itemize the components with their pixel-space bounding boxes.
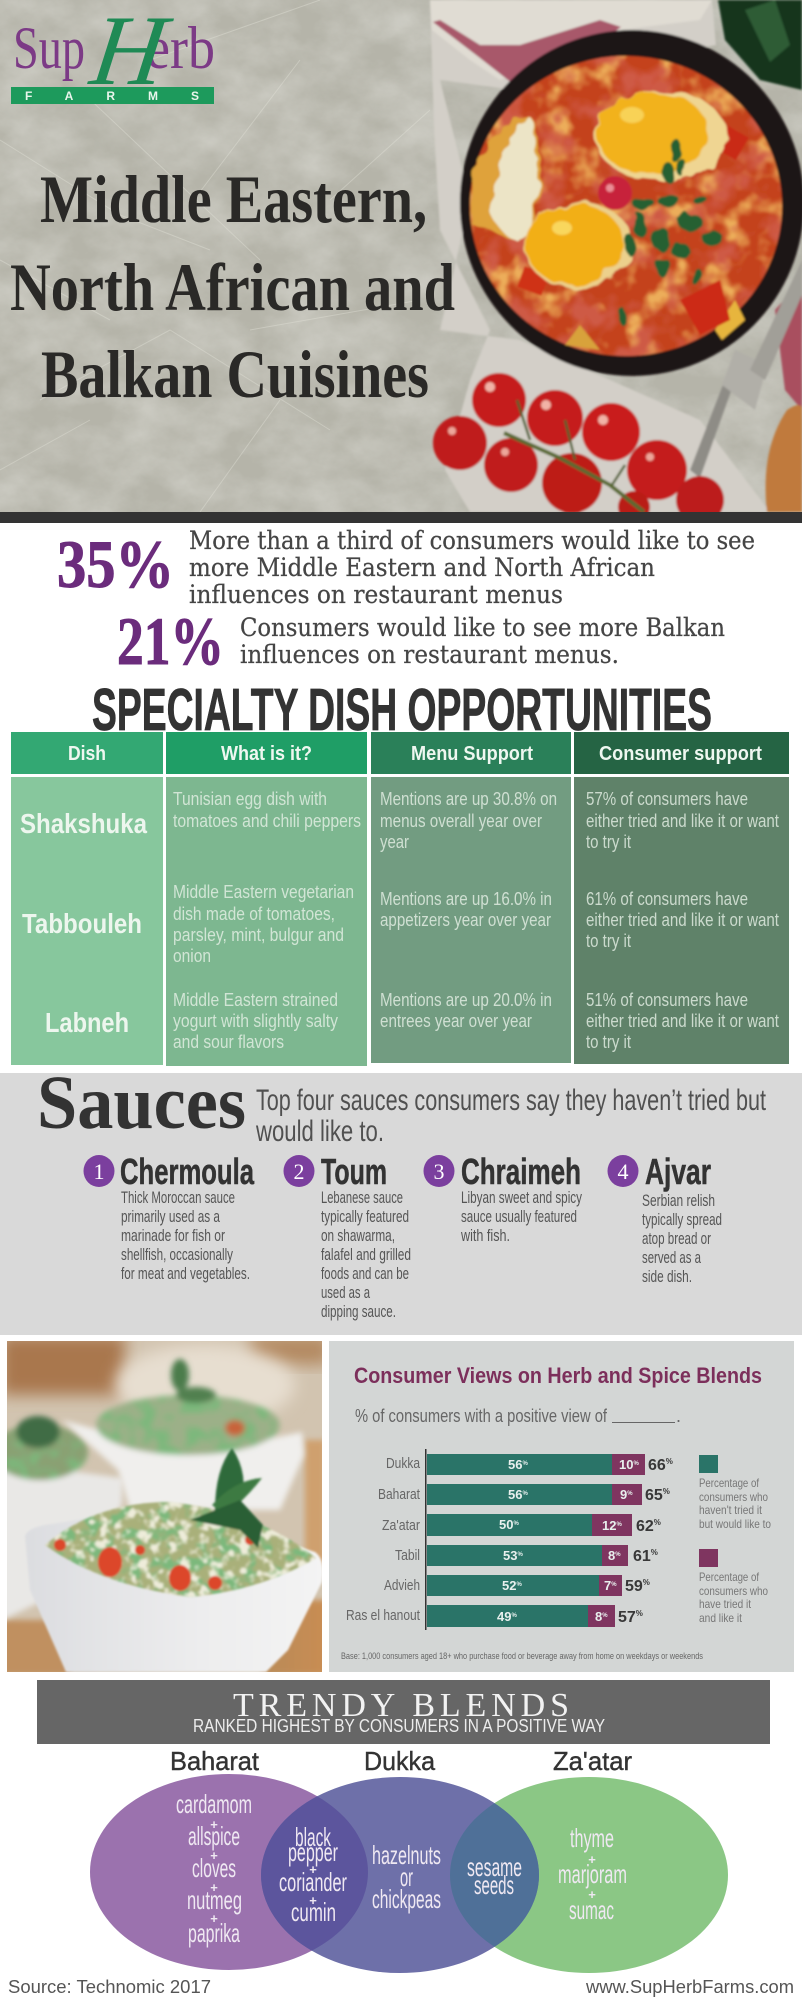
- column: what is it: dish made of tomatoes,: [173, 904, 335, 924]
- column: consumer support: to try it: [586, 1032, 631, 1052]
- stat text: Consumers would like to see more Balkan: [240, 613, 725, 642]
- bar: Baharat: 56: [508, 1487, 522, 1502]
- bar: Baharat: [378, 1484, 670, 1505]
- bar: Za'atar: Za'atar: [382, 1517, 420, 1534]
- sauces intro: [255, 1084, 766, 1148]
- bar: Tabil: 61: [633, 1548, 651, 1565]
- sauce 3: Chraimeh: Chraimeh: [461, 1151, 581, 1192]
- bar: Ras el hanout: 49: [497, 1609, 511, 1624]
- bar: Za'atar: %: [513, 1521, 519, 1527]
- chart title: Consumer Views on Herb and Spice Blends: [354, 1363, 762, 1388]
- chart footnote: Base: 1,000 consumers aged 18+ who purchase food or beverage away from home on weekdays or weekends: [341, 1651, 703, 1661]
- banner title: TRENDY BLENDS: [233, 1687, 569, 1724]
- bar: Dukka: 66: [648, 1457, 666, 1474]
- column: what is it: [166, 777, 367, 1066]
- stat text: influences on restaurant menus.: [240, 640, 619, 669]
- column: what is it: Middle Eastern strained: [173, 990, 338, 1010]
- sauces background: [0, 1073, 802, 1335]
- column: menu support: menus overall year over: [380, 811, 542, 831]
- sauce 2: Toum: Lebanese sauce: [321, 1188, 403, 1207]
- banner background: [37, 1680, 770, 1744]
- venn circles: [90, 1774, 728, 1973]
- sauce 1: Chermoula: shellfish, occasionally: [121, 1245, 233, 1264]
- Za'atar ingredients: +: [588, 1852, 596, 1867]
- bar: Ras el hanout: %: [511, 1613, 517, 1619]
- bar: Dukka: %: [522, 1461, 528, 1467]
- Baharat and Dukka shared ingredients: pepper: [288, 1837, 338, 1867]
- front bowl: [26, 1522, 322, 1672]
- bar chart: [346, 1449, 673, 1630]
- bar: Baharat: %: [522, 1491, 528, 1497]
- Baharat ingredients: +: [210, 1880, 218, 1895]
- bar: Tabil: %: [615, 1552, 621, 1558]
- sauce 2: Toum: foods and can be: [321, 1264, 409, 1283]
- number 35%: 35%: [57, 526, 174, 602]
- column: what is it: Tunisian egg dish with: [173, 789, 327, 809]
- column: what is it: tomatoes and chili peppers: [173, 811, 361, 831]
- stat text: More than a third of consumers would like to see: [189, 526, 755, 555]
- Za'atar ingredients: sumac: [569, 1895, 614, 1925]
- title: Middle Eastern,: [40, 161, 427, 237]
- Baharat ingredients: [176, 1789, 252, 1948]
- sauce 3: Chraimeh: sauce usually featured: [461, 1207, 577, 1226]
- source credit: Source: Technomic 2017: [8, 1977, 211, 1997]
- sauce 2: Toum: typically featured: [321, 1207, 409, 1226]
- stat text: [189, 526, 755, 609]
- sauce 2: Toum: used as a: [321, 1283, 370, 1302]
- Dukka and Za'atar shared ingredients: [467, 1852, 522, 1900]
- logo word FARMS: FARMS: [25, 89, 199, 103]
- Baharat ingredients: allspice: [188, 1821, 240, 1851]
- sauce 4: Ajvar: atop bread or: [642, 1229, 711, 1248]
- website credit: www.SupHerbFarms.com: [585, 1977, 794, 1997]
- panel: sauces: [0, 1061, 802, 1335]
- Za'atar ingredients: [558, 1823, 627, 1925]
- sauce 1: Chermoula: primarily used as a: [121, 1207, 220, 1226]
- sauces heading: Sauces: [37, 1061, 246, 1145]
- Baharat ingredients: cardamom: [176, 1789, 252, 1819]
- venn diagram: spice blends: [90, 1746, 728, 1973]
- bar: Dukka: 10: [619, 1457, 633, 1472]
- bar: Za'atar: [382, 1514, 661, 1536]
- column: consumer support: to try it: [586, 832, 631, 852]
- Baharat ingredients: +: [210, 1848, 218, 1863]
- sauce 3: Chraimeh: [424, 1151, 582, 1245]
- back bowl: [62, 1359, 304, 1510]
- panel: hero banner: [0, 0, 802, 524]
- sauce 1: Chermoula: [84, 1151, 255, 1283]
- bar: Ras el hanout: 57: [618, 1609, 636, 1626]
- column: consumer support: [574, 777, 789, 1064]
- stat text: [240, 613, 725, 669]
- sauce 4: Ajvar: [608, 1151, 722, 1286]
- bar: Baharat: 9: [620, 1487, 627, 1502]
- bar: Dukka: Dukka: [386, 1455, 421, 1472]
- venn headings: Baharat: [170, 1746, 260, 1776]
- sauce 2: Toum: dipping sauce.: [321, 1302, 396, 1321]
- bar: Tabil: 8: [608, 1548, 615, 1563]
- Baharat and Dukka shared ingredients: +: [309, 1862, 317, 1877]
- bar: Za'atar: 62: [636, 1518, 654, 1535]
- sauce 1: Chermoula: 1: [94, 1159, 104, 1184]
- bar: Za'atar: %: [616, 1522, 622, 1528]
- eggs: [523, 89, 726, 288]
- legend: would like to try: but would like to: [699, 1517, 771, 1531]
- column: menu support: appetizers year over year: [380, 910, 551, 930]
- photo: tabbouleh in white bowls: [0, 1335, 330, 1675]
- sauce 2: Toum: on shawarma,: [321, 1226, 395, 1245]
- legend: tried and like: and like it: [699, 1611, 743, 1625]
- bar: Za'atar: 12: [602, 1518, 616, 1533]
- Baharat ingredients: cloves: [192, 1853, 236, 1883]
- sauce 2: Toum: Toum: [321, 1151, 387, 1192]
- number 21%: 21%: [117, 603, 224, 679]
- sauce 1: Chermoula: marinade for fish or: [121, 1226, 225, 1245]
- table header row: What is it?: [221, 743, 312, 765]
- bar: Advieh: [384, 1575, 650, 1596]
- table header row: Dish: [68, 743, 106, 765]
- Dukka ingredients: chickpeas: [372, 1884, 441, 1914]
- Baharat ingredients: paprika: [188, 1918, 240, 1948]
- sauce 1: Chermoula: for meat and vegetables.: [121, 1264, 250, 1283]
- bar: Tabil: [395, 1545, 658, 1566]
- chopped herbs: [619, 138, 723, 326]
- bar: Za'atar: 50: [499, 1517, 513, 1532]
- sauce 1: Chermoula: Thick Moroccan sauce: [121, 1188, 235, 1207]
- Baharat and Dukka shared ingredients: [279, 1822, 347, 1927]
- bar: Ras el hanout: 8: [595, 1609, 602, 1624]
- stone background: [0, 0, 802, 512]
- sauces intro: would like to.: [255, 1115, 384, 1148]
- Baharat ingredients: +: [210, 1817, 218, 1832]
- legend: would like to try: consumers who: [699, 1490, 768, 1504]
- title: Balkan Cuisines: [41, 336, 429, 412]
- bar: Dukka: %: [666, 1457, 673, 1466]
- bar: Baharat: %: [627, 1491, 633, 1497]
- bar: Tabil: 53: [503, 1548, 517, 1563]
- bar: Za'atar: %: [654, 1518, 661, 1527]
- sauce 4: Ajvar: side dish.: [642, 1267, 692, 1286]
- sauce 4: Ajvar: served as a: [642, 1248, 701, 1267]
- Baharat and Dukka shared ingredients: +: [309, 1893, 317, 1908]
- venn headings: Dukka: [364, 1746, 436, 1776]
- legend: would like to try: haven't tried it: [699, 1503, 763, 1517]
- panel: trendy blends banner: [37, 1680, 770, 1744]
- tabbouleh salad: [45, 1448, 316, 1597]
- panel: dish table: [11, 732, 789, 1066]
- sauce 1: Chermoula: Chermoula: [120, 1151, 255, 1192]
- column: menu support: year: [380, 832, 409, 852]
- chart subtitle: .: [676, 1406, 681, 1426]
- bar: Advieh: %: [516, 1582, 522, 1588]
- Dukka and Za'atar shared ingredients: seeds: [474, 1870, 514, 1900]
- legend: would like to try: [699, 1455, 771, 1531]
- bar: Ras el hanout: Ras el hanout: [346, 1607, 421, 1624]
- column: what is it: onion: [173, 946, 211, 966]
- bread slice: [470, 117, 541, 242]
- bar: Advieh: 52: [502, 1578, 516, 1593]
- venn headings: Za'atar: [553, 1746, 632, 1776]
- Baharat ingredients: nutmeg: [187, 1885, 242, 1915]
- bar: Advieh: 7: [604, 1578, 611, 1593]
- photo: shakshuka skillet with tomatoes: [430, 0, 802, 524]
- Baharat ingredients: +: [210, 1911, 218, 1926]
- bar: Dukka: [386, 1454, 673, 1475]
- table header row: Menu Support: [411, 743, 533, 765]
- stat: 35 percent: [57, 526, 755, 609]
- stone crack lines: [0, 0, 430, 512]
- bar: Ras el hanout: %: [636, 1609, 643, 1618]
- table header row: Consumer support: [599, 743, 762, 765]
- bar: Baharat: %: [663, 1487, 670, 1496]
- banner subtitle: RANKED HIGHEST BY CONSUMERS IN A POSITIVE WAY: [193, 1716, 605, 1736]
- column: menu support: [371, 777, 571, 1063]
- bar: Advieh: Advieh: [384, 1577, 420, 1594]
- Za'atar ingredients: thyme: [570, 1823, 614, 1853]
- sauce 2: Toum: [284, 1151, 411, 1321]
- column: menu support: Mentions are up 20.0% in: [380, 990, 552, 1010]
- table header row: [11, 732, 789, 774]
- column: dish: Labneh: [45, 1007, 129, 1038]
- column: consumer support: to try it: [586, 931, 631, 951]
- Dukka ingredients: hazelnuts: [372, 1840, 441, 1870]
- bar: Advieh: 59: [625, 1578, 643, 1595]
- dark divider band: [0, 512, 802, 523]
- chart background: [329, 1341, 794, 1672]
- sauce 4: Ajvar: Serbian relish: [642, 1191, 715, 1210]
- Za'atar ingredients: marjoram: [558, 1859, 627, 1889]
- bar: Tabil: %: [651, 1548, 658, 1557]
- bar: Baharat: Baharat: [378, 1486, 421, 1503]
- panel: consumer views chart: [329, 1341, 794, 1672]
- venn headings: [170, 1746, 632, 1776]
- title: [11, 175, 454, 398]
- logo word erb: erb: [146, 15, 215, 81]
- column: what is it: Middle Eastern vegetarian: [173, 882, 354, 902]
- column: consumer support: 51% of consumers have: [586, 990, 748, 1010]
- sauce 3: Chraimeh: 3: [434, 1159, 444, 1184]
- bar: Ras el hanout: %: [602, 1613, 608, 1619]
- Dukka and Za'atar shared ingredients: sesame: [467, 1852, 522, 1882]
- column: what is it: and sour flavors: [173, 1032, 284, 1052]
- logo word Sup: Sup: [13, 15, 85, 81]
- sauce 2: Toum: 2: [294, 1159, 304, 1184]
- column: consumer support: 61% of consumers have: [586, 889, 748, 909]
- bar: Advieh: %: [611, 1582, 617, 1588]
- chart subtitle: % of consumers with a positive view of: [355, 1406, 608, 1426]
- legend: would like to try: Percentage of: [699, 1476, 760, 1490]
- column: what is it: yogurt with slightly salty: [173, 1011, 338, 1031]
- Baharat and Dukka shared ingredients: coriander: [279, 1867, 347, 1897]
- Za'atar ingredients: +: [588, 1887, 596, 1902]
- column: menu support: Mentions are up 16.0% in: [380, 889, 552, 909]
- Dukka ingredients: or: [400, 1862, 413, 1892]
- sauce 4: Ajvar: 4: [618, 1159, 628, 1184]
- column: dish: [11, 777, 163, 1065]
- title: North African and: [10, 249, 455, 325]
- stat text: influences on restaurant menus: [189, 580, 563, 609]
- bar: Tabil: Tabil: [395, 1547, 420, 1564]
- logo bar: [11, 87, 214, 104]
- bar: Advieh: %: [643, 1578, 650, 1587]
- sauce 4: Ajvar: Ajvar: [645, 1151, 711, 1192]
- sauce 3: Chraimeh: with fish.: [460, 1226, 510, 1245]
- Dukka ingredients: [372, 1840, 441, 1914]
- legend: tried and like: consumers who: [699, 1584, 768, 1598]
- column: consumer support: 57% of consumers have: [586, 789, 748, 809]
- column: menu support: entrees year over year: [380, 1011, 532, 1031]
- column: menu support: Mentions are up 30.8% on: [380, 789, 557, 809]
- chart axis: [425, 1449, 426, 1630]
- legend: tried and like: Percentage of: [699, 1570, 760, 1584]
- bar: Dukka: 56: [508, 1457, 522, 1472]
- sauce 3: Chraimeh: Libyan sweet and spicy: [461, 1188, 582, 1207]
- Baharat and Dukka shared ingredients: cumin: [291, 1897, 336, 1927]
- Baharat and Dukka shared ingredients: black: [295, 1822, 332, 1852]
- legend: tried and like: have tried it: [699, 1597, 752, 1611]
- sauce 4: Ajvar: typically spread: [642, 1210, 722, 1229]
- stat: 21 percent: [117, 603, 725, 679]
- legend: tried and like: [699, 1549, 768, 1625]
- left bowl: [0, 1416, 123, 1620]
- stone texture: [0, 0, 802, 512]
- column: what is it: parsley, mint, bulgur and: [173, 925, 344, 945]
- column: dish: Shakshuka: [20, 808, 147, 839]
- bar: Tabil: %: [517, 1552, 523, 1558]
- logo: SupHerb Farms: [11, 18, 214, 104]
- bar: Ras el hanout: [346, 1605, 643, 1627]
- sauce 2: Toum: falafel and grilled: [321, 1245, 411, 1264]
- bar: Baharat: 65: [645, 1487, 663, 1504]
- stat text: more Middle Eastern and North African: [189, 553, 655, 582]
- bar: Dukka: %: [633, 1461, 639, 1467]
- column: dish: Tabbouleh: [22, 908, 142, 939]
